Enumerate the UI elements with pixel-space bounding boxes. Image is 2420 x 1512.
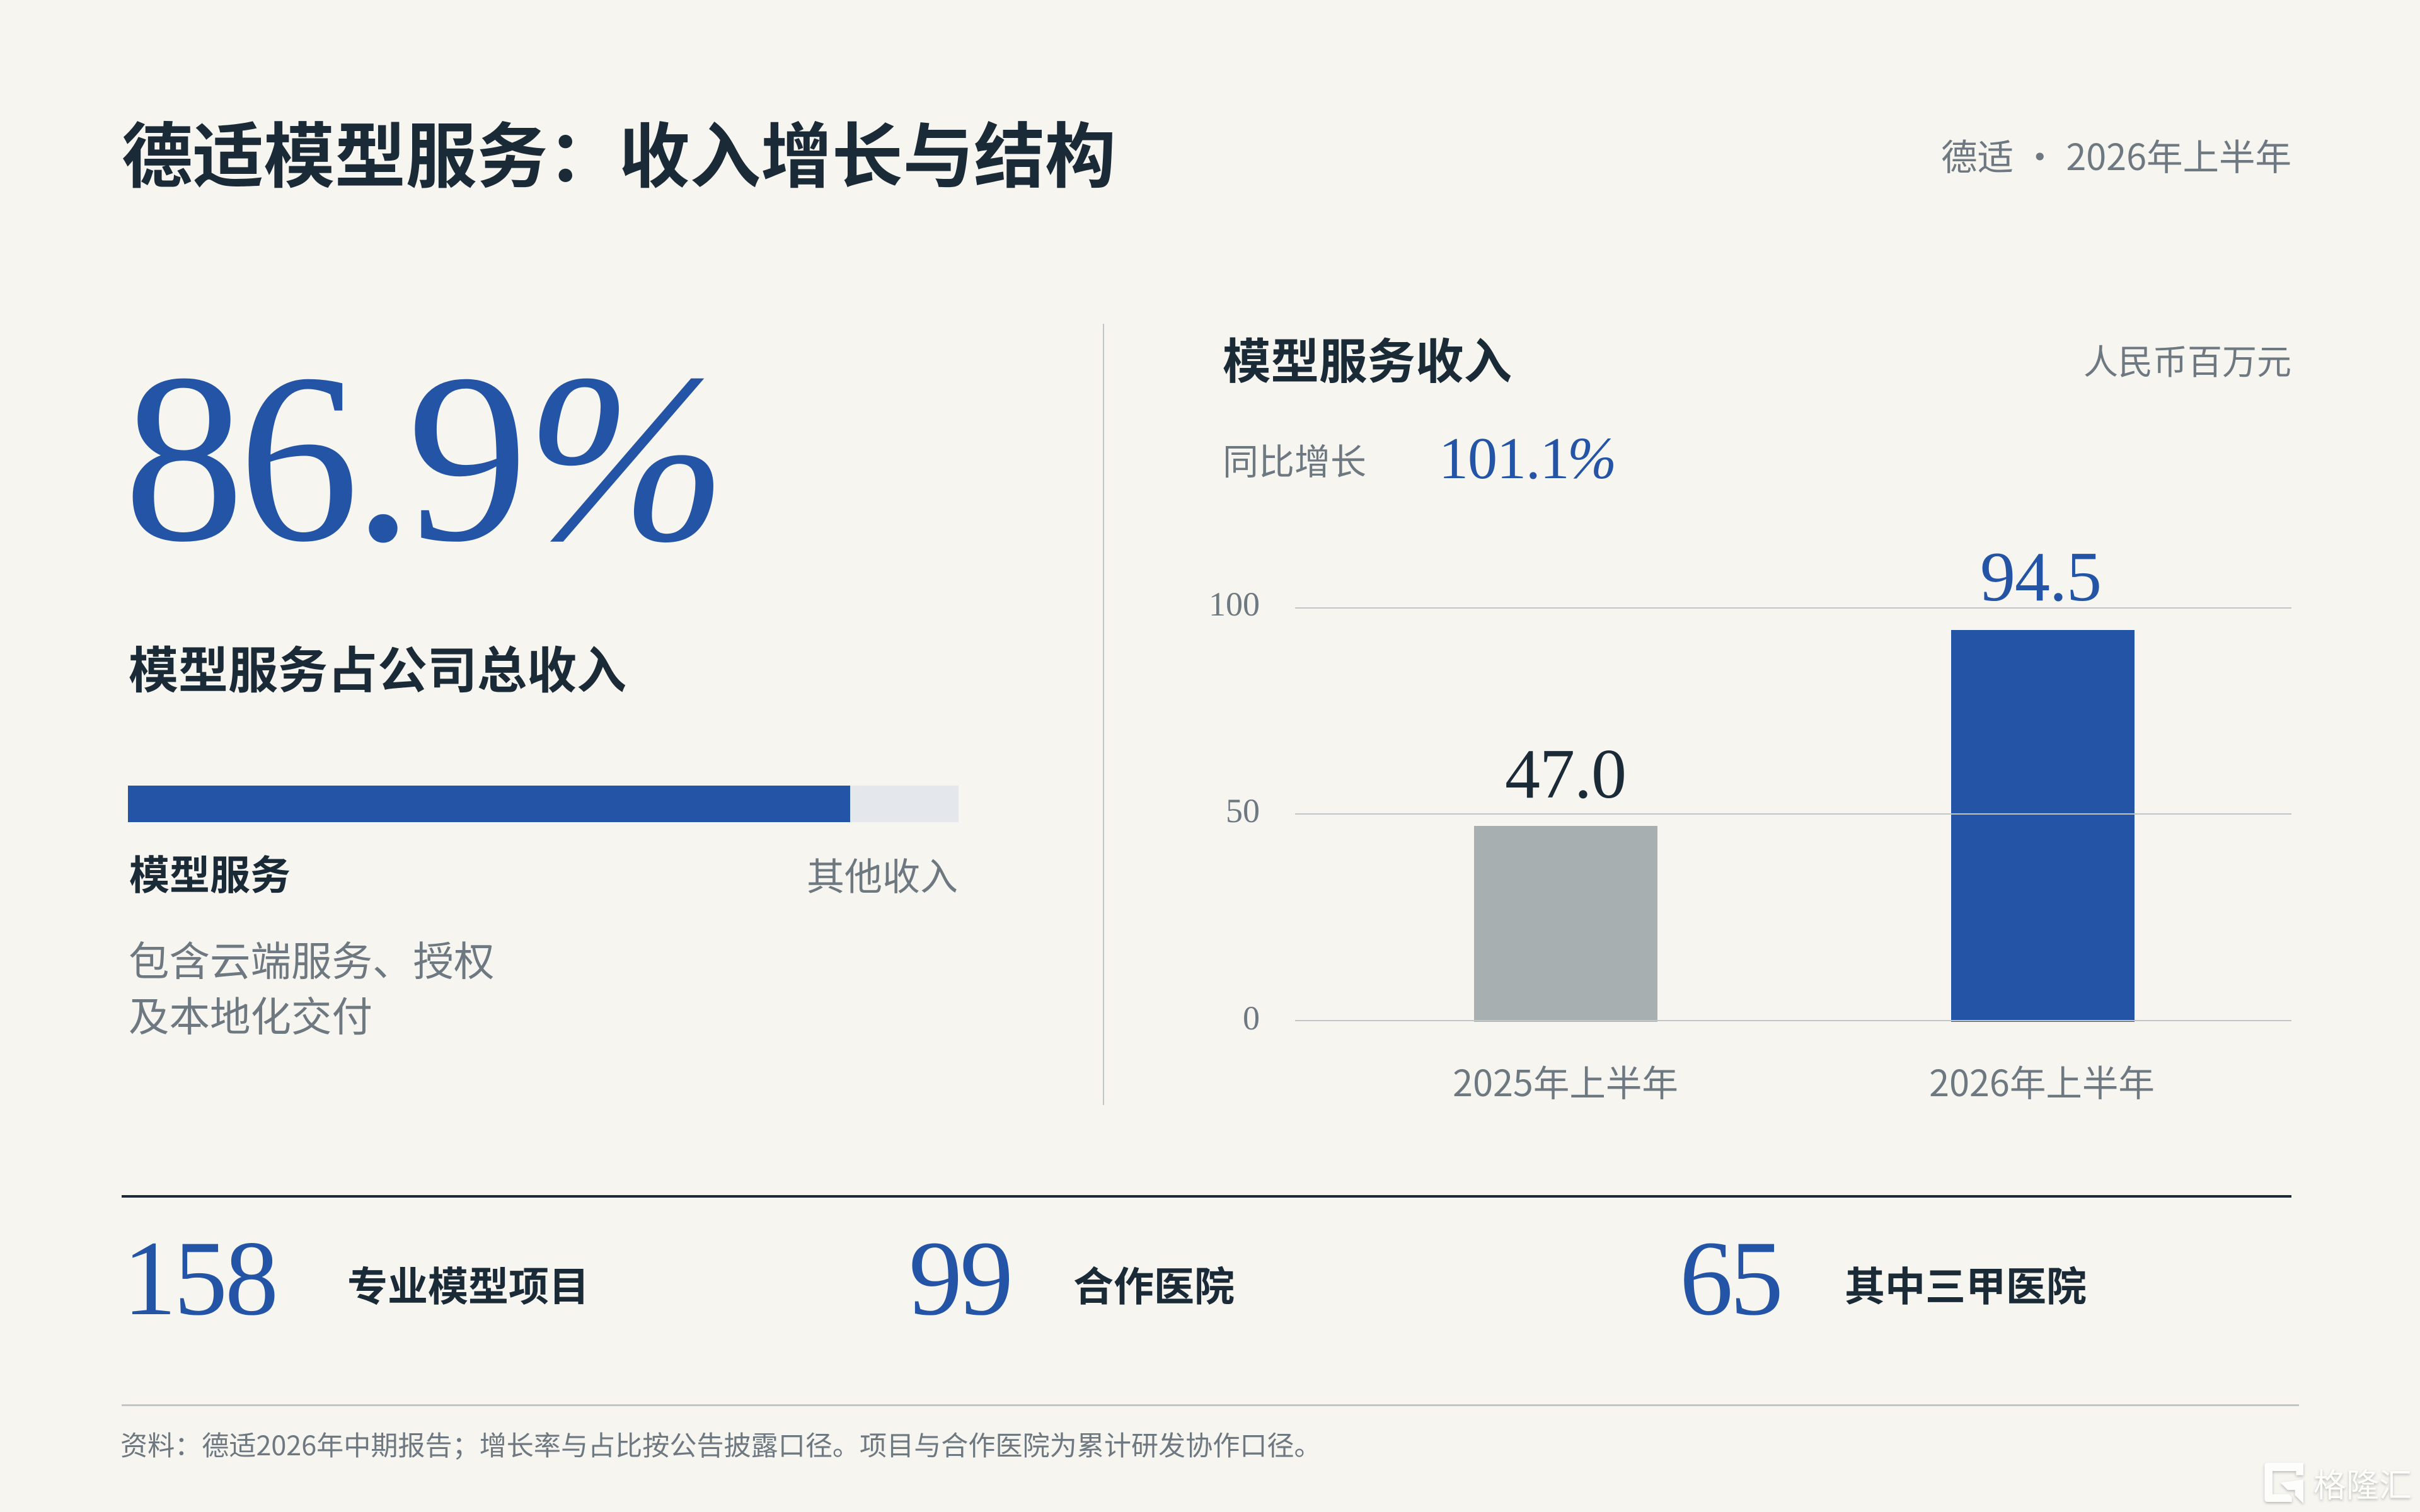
value: 94.5: 94.5 [1980, 538, 2101, 616]
stat: projects [123, 1219, 589, 1337]
footer rule [122, 1404, 2299, 1406]
panel divider [1103, 324, 1104, 1105]
heading: model service revenue: 模型服务收入 [1223, 323, 1512, 393]
y axis labels: 0 [1243, 999, 1260, 1037]
x axis labels: 2025年上半年 [1453, 1054, 1678, 1107]
stat: partner hospitals [909, 1219, 1235, 1337]
subtitle: company and period: 德适 · 2026年上半年 [1941, 128, 2291, 181]
stat: partner hospitals: 合作医院 [1073, 1255, 1235, 1313]
y axis labels: 100 [1209, 585, 1260, 623]
x axis labels: 2026年上半年 [1929, 1054, 2155, 1107]
value: 47.0: 47.0 [1505, 735, 1626, 813]
source note: 资料：德适2026年中期报告；增长率与占比按公告披露口径。项目与合作医院为累计研发协作口径。 [120, 1424, 1322, 1463]
y axis labels [1209, 585, 1260, 1037]
y axis labels: 50 [1226, 792, 1260, 830]
description text: 包含云端服务、授权 [129, 929, 495, 988]
x axis labels [1453, 1054, 2155, 1107]
stat: tertiary hospitals [1680, 1219, 2087, 1337]
panel: share of revenue [124, 324, 959, 1043]
bar chart [1209, 538, 2291, 1107]
description text [129, 929, 495, 1043]
label: yoy growth: 同比增长 [1223, 433, 1366, 485]
panel: revenue chart [1209, 323, 2291, 1107]
watermark logo [2264, 1459, 2412, 1506]
stat: projects: 专业模型项目 [347, 1255, 589, 1313]
big number: 86.9%: 86.9 [124, 324, 522, 592]
value: yoy growth: 101.1 [1439, 426, 1569, 491]
heading: share label: 模型服务占公司总收入 [129, 630, 626, 702]
progress bar [128, 786, 959, 822]
icon: G mark [2264, 1463, 2303, 1504]
watermark text: 格隆汇 [2313, 1459, 2412, 1506]
unit label: 人民币百万元 [2083, 334, 2291, 384]
label: model services: 模型服务 [129, 844, 291, 902]
description text: 及本地化交付 [129, 984, 372, 1043]
stats top rule [122, 1195, 2291, 1198]
big number: 86.9%: % [526, 324, 721, 592]
stat: tertiary hospitals: 其中三甲医院 [1845, 1255, 2087, 1313]
value: yoy growth: % [1567, 426, 1616, 491]
label: other revenue: 其他收入 [807, 847, 958, 902]
stat: partner hospitals: 99 [909, 1219, 1011, 1337]
stat: tertiary hospitals: 65 [1680, 1219, 1780, 1337]
bar: 2025 H1 [1474, 826, 1657, 1022]
bar: 2026 H1 [1951, 630, 2135, 1022]
stat: projects: 158 [123, 1219, 276, 1337]
title: 德适模型服务：收入增长与结构 [122, 100, 1116, 202]
